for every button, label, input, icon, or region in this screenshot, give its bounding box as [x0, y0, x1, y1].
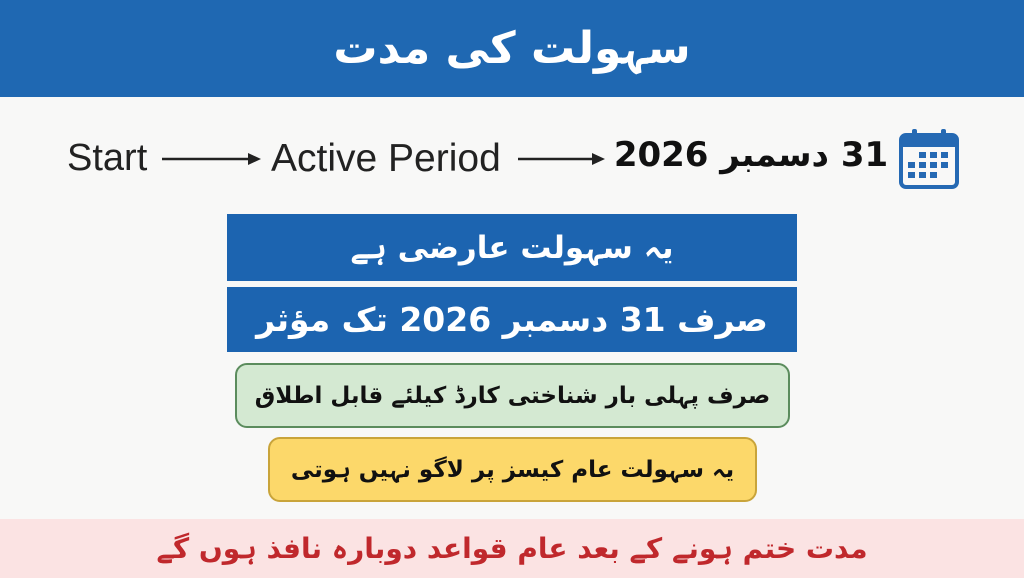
- blue box 2: [227, 287, 797, 352]
- end date: 31 دسمبر 2026: [614, 135, 888, 175]
- icon: calendar: [899, 129, 959, 189]
- yellow box: [268, 437, 757, 502]
- arrow 1: [162, 153, 261, 165]
- green box: صرف پہلی بار شناختی کارڈ کیلئے قابل اطلاق: [255, 382, 770, 408]
- text: Active Period: Active Period: [271, 137, 501, 180]
- arrow 2: [518, 153, 605, 165]
- text: Start: Start: [67, 137, 147, 179]
- blue box 1: یہ سہولت عارضی ہے: [350, 230, 674, 266]
- header: title bar: [0, 0, 1024, 97]
- footer note: مدت ختم ہونے کے بعد عام قواعد دوبارہ نافذ ہوں گے: [156, 532, 868, 565]
- timeline row: [67, 129, 959, 189]
- footer note: [0, 519, 1024, 578]
- blue box 2: صرف 31 دسمبر 2026 تک مؤثر: [256, 300, 768, 339]
- green box: [235, 363, 790, 428]
- blue box 1: [227, 214, 797, 281]
- yellow box: یہ سہولت عام کیسز پر لاگو نہیں ہوتی: [291, 456, 734, 482]
- header: title bar: سہولت کی مدت: [333, 23, 691, 74]
